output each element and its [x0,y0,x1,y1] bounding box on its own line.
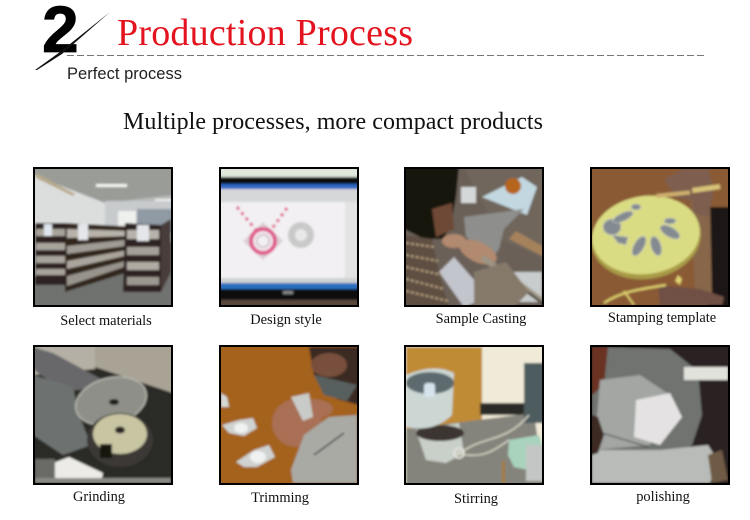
panel: trimming [219,345,359,506]
caption: Stamping template [608,310,716,326]
caption: Select materials [60,313,152,329]
section number 2 with slash [35,0,110,70]
panel: polishing [590,345,730,505]
photo: warehouse shelves [33,167,173,307]
photo: worker casting [404,167,544,307]
photo: grinding wheel [33,345,173,485]
heading: Multiple processes, more compact products [123,109,543,135]
photo: yellow template plate [586,167,730,307]
caption: Grinding [73,489,125,505]
panel: stamping template [586,167,730,326]
panel: design style [219,167,359,328]
panel: grinding [33,345,173,505]
panel: sample casting [404,167,544,327]
photo: polishing bag [590,345,730,485]
caption: Trimming [251,490,309,506]
photo: computer monitor [219,167,359,307]
photo: stirring machine [404,345,544,485]
subtitle: Perfect process [67,65,182,83]
caption: polishing [636,489,690,505]
caption: Sample Casting [436,311,526,327]
title: Production Process [117,12,413,54]
photo: hands trimming jewellery [219,345,359,485]
caption: Stirring [454,491,498,507]
caption: Design style [250,312,322,328]
panel: select materials [33,167,173,329]
panel: stirring [404,345,544,507]
